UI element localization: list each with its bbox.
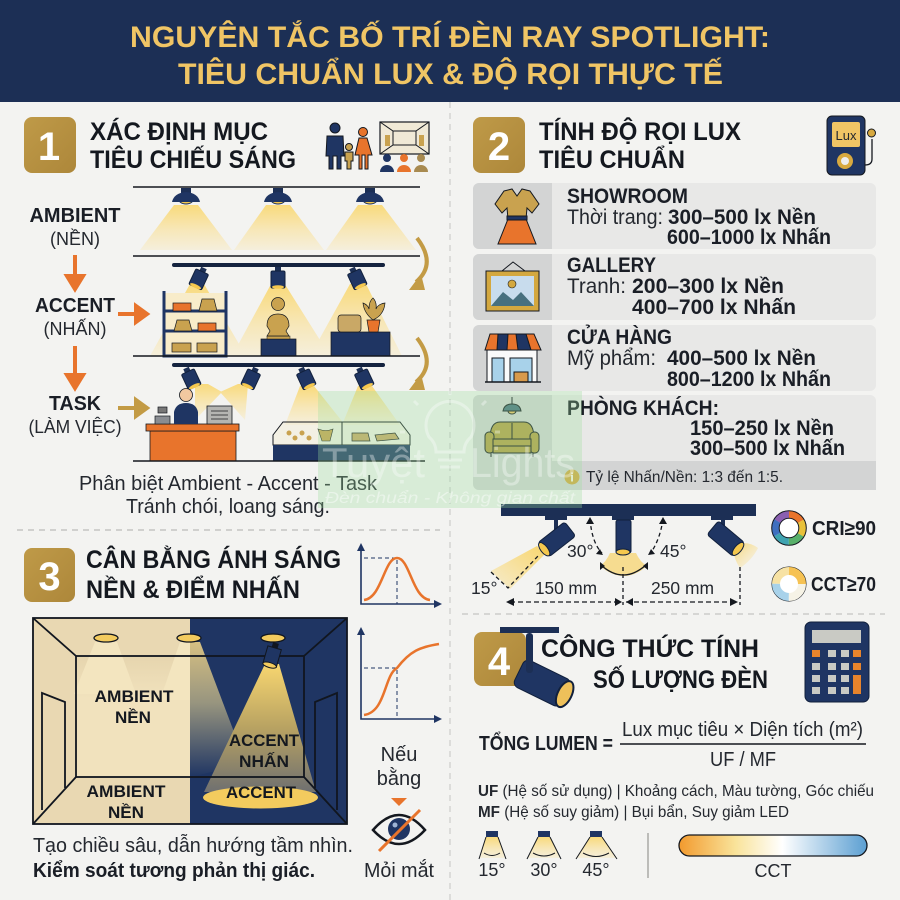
- chart: bell curve: [357, 543, 442, 608]
- heading 2: TIÊU CHUẨN: [539, 144, 685, 174]
- title banner: [0, 0, 900, 102]
- icon: lux meter: Lux: [836, 128, 857, 143]
- row: cửa hàng: CỬA HÀNG: [567, 325, 672, 349]
- label: ambient: AMBIENT: [30, 205, 120, 227]
- legend: CRI: [772, 511, 876, 545]
- heading 4: SỐ LƯỢNG ĐÈN: [593, 664, 768, 694]
- row: gallery: Tranh:: [567, 275, 626, 298]
- icon: large track spotlight: [500, 627, 578, 711]
- room cross-section: ACCENT: [226, 783, 297, 802]
- formula: TỔNG LUMEN =: [479, 731, 613, 755]
- label: task: (LÀM VIỆC): [28, 417, 122, 437]
- row: gallery: 400–700 lx Nhấn: [632, 296, 796, 319]
- icon: family: [326, 123, 372, 169]
- definitions UF MF: UF (Hệ số sử dụng) | Khoảng cách, Màu tường, Góc chiếu: [478, 783, 874, 800]
- panel 2: tính độ rọi lux: [473, 116, 876, 490]
- legend: CCT: CCT≥70: [811, 574, 876, 596]
- table with items: [331, 298, 390, 356]
- note: if equal: bằng: [377, 767, 421, 790]
- badge 4: [474, 632, 526, 686]
- watermark: Đèn chuẩn - Không gian chất: [325, 490, 576, 507]
- heading 1: XÁC ĐỊNH MỤC: [90, 117, 268, 146]
- heading 3: CÂN BẰNG ÁNH SÁNG: [86, 544, 341, 574]
- label: ambient: [30, 205, 120, 249]
- legend: CRI: CRI≥90: [812, 518, 876, 540]
- row: phòng khách: [473, 395, 876, 490]
- caption 3: Kiểm soát tương phản thị giác.: [33, 860, 315, 882]
- room cross-section: NỀN: [108, 803, 144, 822]
- badge 3: [24, 548, 75, 602]
- icon: dress: [495, 189, 539, 244]
- row: phòng khách: 150–250 lx Nền: [690, 417, 834, 440]
- room cross-section: NHẤN: [239, 752, 289, 771]
- label: accent: [35, 295, 115, 339]
- note: if equal: [377, 744, 421, 790]
- diagram: track spacing and beam angles: 250 mm: [651, 578, 714, 598]
- row: showroom: SHOWROOM: [567, 185, 688, 208]
- diagram: track spacing and beam angles: 30°: [567, 541, 593, 561]
- beam angle icons: [478, 831, 617, 880]
- arrow: accent to task: [67, 346, 83, 388]
- beam angle icons: 45°: [582, 860, 610, 880]
- definitions UF MF: MF (Hệ số suy giảm) | Bụi bẩn, Suy giảm LED: [478, 803, 789, 821]
- caption 1: Tránh chói, loang sáng.: [126, 496, 330, 518]
- label: accent: ACCENT: [35, 295, 115, 317]
- panel 4: công thức tính số lượng đèn: [474, 622, 874, 881]
- arrow: curved accent to task: [409, 338, 427, 390]
- caption 1: [79, 473, 378, 518]
- cashier counter: [146, 388, 239, 461]
- row: showroom: Thời trang:: [567, 206, 663, 229]
- badge 4: 4: [488, 640, 511, 684]
- heading 4: [541, 633, 768, 694]
- title banner: TIÊU CHUẨN LUX & ĐỘ RỌI THỰC TẾ: [178, 57, 723, 91]
- beam angle icons: 30°: [530, 860, 558, 880]
- room cross-section: [32, 618, 347, 824]
- note: ratio: Tỷ lệ Nhấn/Nền: 1:3 đến 1:5.: [586, 469, 783, 486]
- formula: [479, 719, 866, 771]
- label: ambient: (NỀN): [50, 228, 100, 249]
- bust on plinth: [261, 298, 296, 356]
- definitions UF MF: [478, 783, 874, 821]
- row: cửa hàng: 400–500 lx Nền: [667, 347, 816, 370]
- row: cửa hàng: 800–1200 lx Nhấn: [667, 368, 831, 391]
- icon: shop: [485, 334, 541, 382]
- room cross-section: ACCENT: [229, 731, 300, 750]
- note: ratio: i: [570, 470, 574, 484]
- badge 2: [473, 117, 525, 173]
- chart: s-curve: [357, 627, 442, 723]
- icon: lux meter: [827, 116, 876, 175]
- heading 2: TÍNH ĐỘ RỌI LUX: [539, 116, 741, 146]
- room cross-section: AMBIENT: [94, 687, 174, 706]
- heading 3: [86, 544, 341, 604]
- beam angle icons: 15°: [478, 860, 506, 880]
- row: showroom: 600–1000 lx Nhấn: [667, 226, 831, 249]
- heading 1: [90, 117, 296, 174]
- diagram: track spacing and beam angles: [471, 504, 758, 606]
- icon: crossed eye: [373, 810, 425, 851]
- icon: calculator: [805, 622, 869, 702]
- formula: UF / MF: [710, 749, 776, 771]
- arrow: task to counter: [118, 400, 147, 416]
- arrow: accent to shelf: [118, 306, 147, 322]
- row: showroom: [473, 183, 876, 249]
- badge 2: 2: [488, 125, 510, 169]
- room cross-section: NỀN: [115, 708, 151, 727]
- icon: pendant and sofa: [485, 397, 539, 457]
- row: phòng khách: 300–500 lx Nhấn: [690, 437, 845, 460]
- diagram: track spacing and beam angles: 15°: [471, 578, 497, 598]
- row: gallery: [473, 254, 876, 320]
- diagram: track spacing and beam angles: 45°: [660, 541, 686, 561]
- panel 1: xác định mục tiêu chiếu sáng: [24, 117, 429, 518]
- CCT scale: [679, 835, 867, 881]
- caption 3: Tạo chiều sâu, dẫn hướng tầm nhìn.: [33, 834, 353, 857]
- caption 3: [33, 834, 353, 882]
- icon: gallery audience: [380, 122, 429, 172]
- task row: [133, 363, 425, 461]
- icon: framed picture: [486, 262, 539, 311]
- note: if equal: Nếu: [381, 744, 417, 766]
- panel 3: cân bằng ánh sáng: [24, 543, 442, 882]
- arrow: ambient to accent: [67, 255, 83, 289]
- badge 1: [24, 117, 76, 173]
- row: cửa hàng: [473, 325, 876, 391]
- label: accent: (NHẤN): [44, 318, 106, 339]
- title banner: NGUYÊN TẮC BỐ TRÍ ĐÈN RAY SPOTLIGHT:: [130, 20, 770, 54]
- row: cửa hàng: Mỹ phẩm:: [567, 347, 656, 370]
- row: phòng khách: PHÒNG KHÁCH:: [567, 396, 719, 420]
- badge 3: 3: [38, 555, 61, 599]
- label: task: TASK: [49, 393, 102, 415]
- caption 1: Phân biệt Ambient - Accent - Task: [79, 473, 378, 495]
- label: eye strain: Mỏi mắt: [364, 859, 434, 882]
- accent row: [133, 263, 420, 356]
- jewellery display case: [273, 422, 410, 461]
- heading 1: TIÊU CHIẾU SÁNG: [90, 144, 296, 174]
- shelf: [164, 291, 226, 356]
- diagram: track spacing and beam angles: 150 mm: [535, 578, 597, 598]
- heading 2: [539, 116, 741, 174]
- row: gallery: 200–300 lx Nền: [632, 275, 784, 298]
- icon: down triangle: [391, 798, 407, 806]
- label: task: [28, 393, 122, 437]
- row: gallery: GALLERY: [567, 254, 656, 277]
- row: showroom: 300–500 lx Nền: [668, 206, 816, 229]
- badge 1: 1: [38, 125, 60, 169]
- heading 3: NỀN & ĐIỂM NHẤN: [86, 575, 300, 604]
- ambient row: [133, 187, 420, 256]
- CCT scale: CCT: [754, 861, 792, 881]
- watermark: Tuyệt: [322, 439, 425, 486]
- heading 4: CÔNG THỨC TÍNH: [541, 633, 759, 663]
- room cross-section: AMBIENT: [86, 782, 166, 801]
- legend: CCT: [772, 567, 876, 601]
- formula: Lux mục tiêu × Diện tích (m²): [622, 719, 863, 741]
- arrow: curved ambient to accent: [409, 238, 427, 290]
- watermark: [318, 391, 582, 508]
- watermark: Lights: [470, 439, 575, 486]
